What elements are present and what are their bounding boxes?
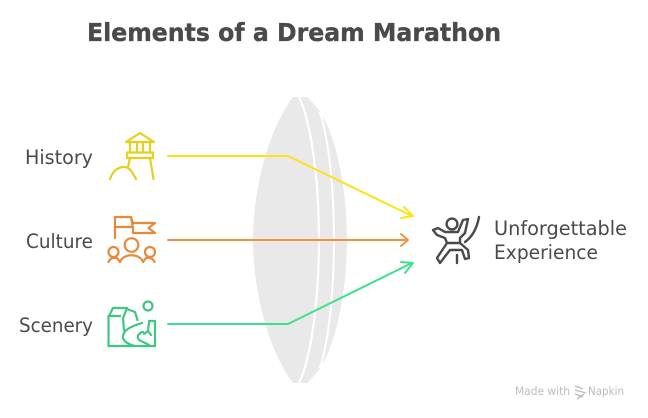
icon: mountain scenery [108, 302, 155, 346]
watermark: Made with [515, 384, 570, 398]
icon: runner [433, 217, 479, 263]
watermark: Napkin [588, 384, 624, 398]
arrow: history to experience [168, 156, 413, 218]
label: Unforgettable Experience: Unforgettable [494, 217, 627, 240]
label: History: History [25, 146, 93, 169]
arrow: scenery to experience [168, 262, 413, 324]
label: Unforgettable Experience: Experience [494, 241, 598, 264]
label: Culture: Culture [26, 230, 93, 253]
arrow: culture to experience [168, 234, 408, 246]
label: Scenery: Scenery [19, 314, 93, 337]
title: Elements of a Dream Marathon [87, 18, 501, 47]
watermark [515, 384, 624, 399]
label: Unforgettable Experience [494, 217, 627, 264]
icon: temple on a hill [110, 133, 154, 179]
lens [253, 95, 347, 385]
icon: flag and people [108, 217, 155, 262]
